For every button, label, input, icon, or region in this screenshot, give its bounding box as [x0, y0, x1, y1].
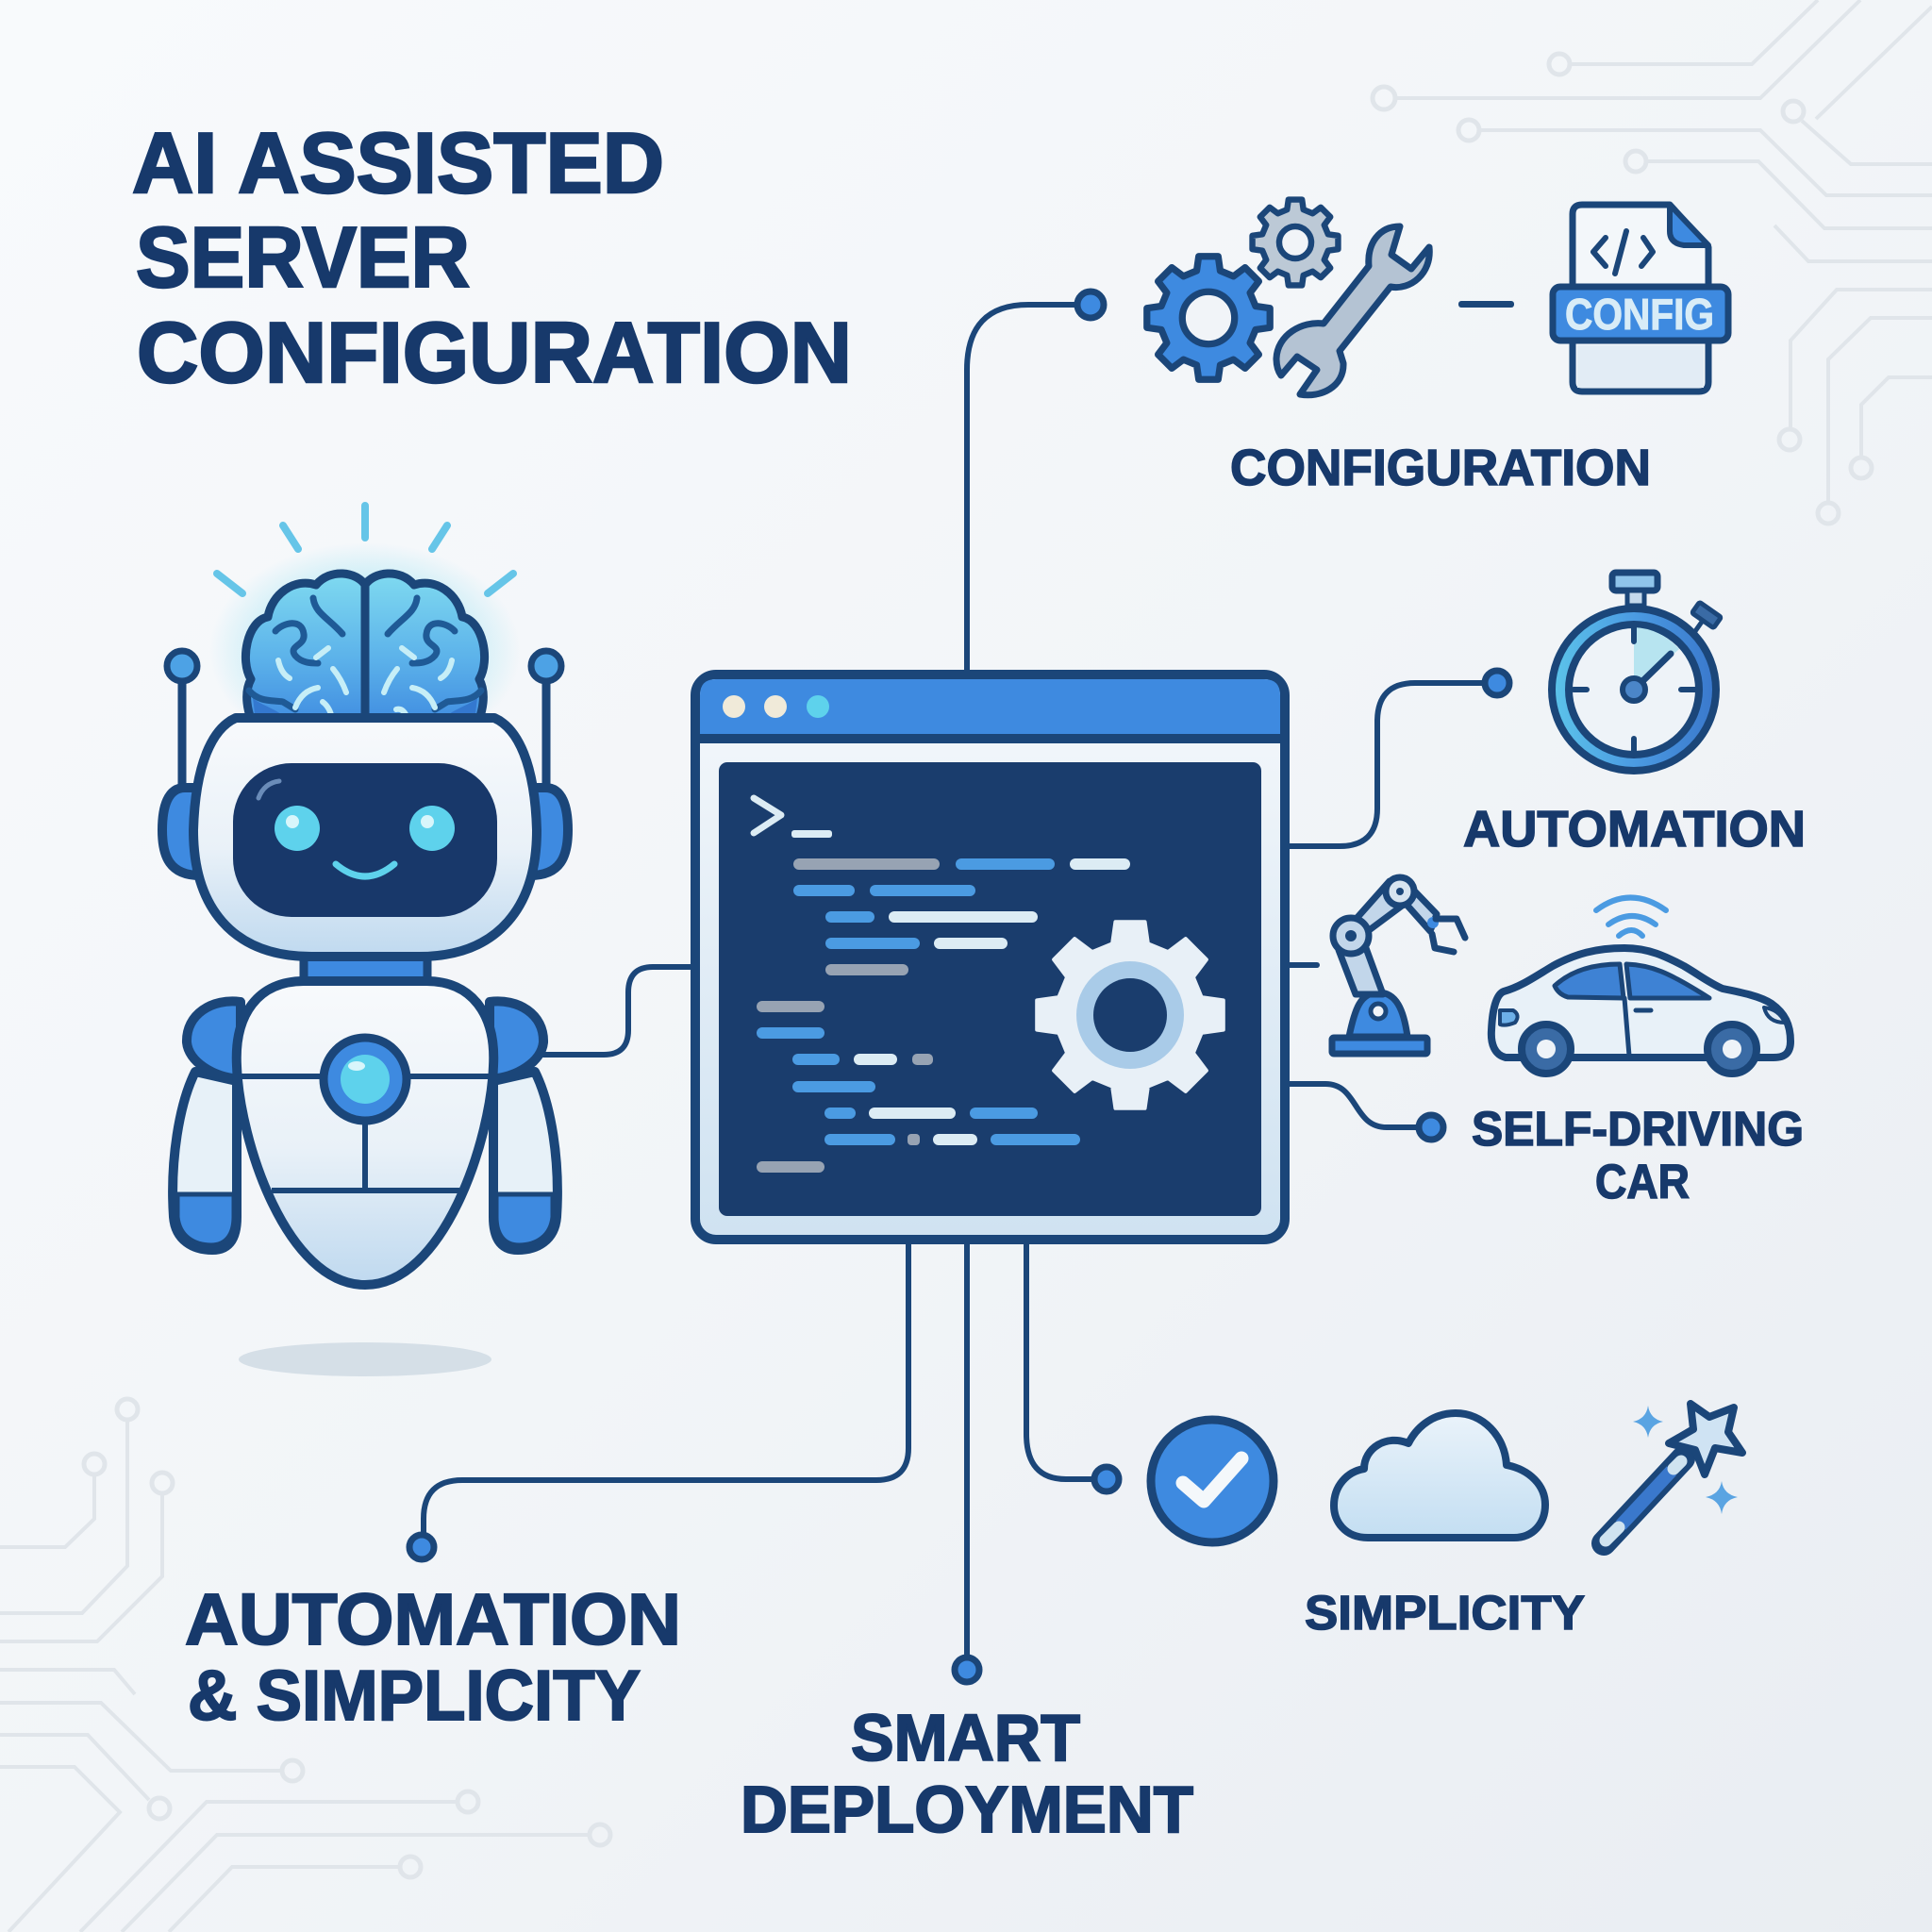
title bar separator	[695, 734, 1285, 743]
large gear	[1037, 922, 1224, 1108]
configuration icons	[1147, 200, 1728, 395]
brain	[245, 574, 485, 728]
label: self-driving car: CAR	[1595, 1155, 1690, 1208]
icon: check badge	[1151, 1420, 1274, 1542]
label: automation and simplicity: AUTOMATION	[185, 1579, 681, 1660]
icon: config file: CONFIG	[1565, 290, 1714, 339]
title: CONFIGURATION	[137, 306, 852, 401]
left arm	[173, 1072, 237, 1250]
label: automation and simplicity	[185, 1579, 681, 1735]
connector node: automation and simplicity	[409, 1535, 434, 1559]
torso	[237, 981, 493, 1285]
right arm	[493, 1072, 558, 1250]
connector node: configuration	[1077, 291, 1104, 318]
torso panel lines	[240, 1076, 491, 1191]
robot character	[162, 506, 568, 1376]
label: self-driving car	[1472, 1102, 1804, 1208]
title: SERVER	[136, 210, 470, 306]
brain glow	[209, 542, 521, 759]
window frame	[695, 675, 1285, 1240]
wifi signal	[1596, 898, 1666, 936]
connector node: self-driving car	[1419, 1115, 1443, 1140]
ear pieces	[162, 788, 568, 875]
connector node: smart deployment	[955, 1657, 979, 1682]
dash connector	[1458, 301, 1514, 308]
connector lines	[424, 305, 1486, 1656]
icon: wrench	[1276, 226, 1429, 395]
neck	[304, 955, 427, 983]
icon: blue gear	[1147, 257, 1270, 379]
label: automation: AUTOMATION	[1463, 801, 1806, 858]
connector node: simplicity	[1094, 1467, 1119, 1491]
eyes	[275, 806, 455, 851]
title	[132, 116, 852, 401]
idea rays	[217, 506, 513, 593]
window buttons	[723, 695, 829, 718]
antennae	[167, 651, 561, 788]
car door and details	[1624, 998, 1651, 1056]
icon: self-driving car	[1491, 898, 1790, 1074]
terminal screen	[719, 762, 1261, 1216]
head	[193, 718, 537, 957]
icon: cloud	[1334, 1413, 1545, 1538]
icon: small gray gear	[1253, 200, 1338, 285]
shoulders	[187, 1001, 543, 1079]
icon: stopwatch	[1552, 573, 1721, 771]
car windows	[1555, 964, 1709, 998]
icon: magic wand	[1604, 1404, 1742, 1543]
wheels	[1522, 1024, 1757, 1074]
icon: robotic arm	[1332, 877, 1465, 1054]
face screen	[233, 763, 497, 917]
title bar	[700, 679, 1280, 734]
chest light	[324, 1038, 407, 1121]
prompt symbol	[754, 798, 832, 838]
label: smart deployment: SMART	[851, 1701, 1080, 1774]
code lines	[757, 858, 1130, 1173]
terminal window	[695, 675, 1285, 1240]
smile	[336, 864, 394, 876]
face highlight	[258, 781, 279, 798]
label: self-driving car: SELF-DRIVING	[1472, 1102, 1804, 1156]
label: simplicity: SIMPLICITY	[1305, 1586, 1585, 1640]
car body	[1491, 948, 1790, 1058]
label: configuration: CONFIGURATION	[1230, 440, 1651, 496]
label: smart deployment	[741, 1701, 1193, 1846]
connector node: automation	[1485, 671, 1509, 695]
title: AI ASSISTED	[132, 116, 664, 211]
label: smart deployment: DEPLOYMENT	[741, 1773, 1193, 1846]
label: automation and simplicity: & SIMPLICITY	[188, 1656, 641, 1735]
icon: config file	[1553, 205, 1728, 391]
robot floor shadow	[239, 1342, 491, 1376]
